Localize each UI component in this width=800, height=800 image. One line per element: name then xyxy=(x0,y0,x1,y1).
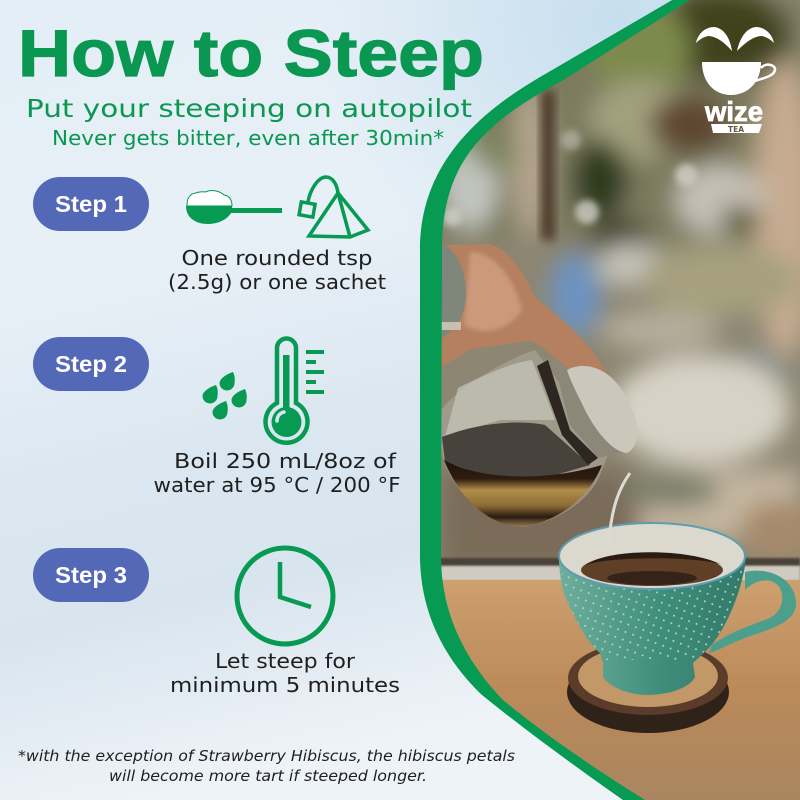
photo: table xyxy=(440,580,800,800)
step 3 badge xyxy=(33,548,149,602)
photo: window sill xyxy=(440,558,800,566)
step 3 badge: Step 3 xyxy=(55,562,127,588)
title: How to Steep xyxy=(18,16,484,90)
photo: hand xyxy=(441,243,607,381)
step 1 text xyxy=(168,246,386,294)
green curved band xyxy=(400,0,690,800)
photo: blurred garden backdrop xyxy=(400,0,800,570)
subtitle: Put your steeping on autopilot xyxy=(26,94,472,123)
photo: pouring water xyxy=(609,473,630,540)
footnote: *with the exception of Strawberry Hibiscus, the hibiscus petals xyxy=(18,747,515,765)
step 3 text: minimum 5 minutes xyxy=(170,673,400,697)
step 1 badge: Step 1 xyxy=(55,191,127,217)
icon: clock xyxy=(237,548,333,644)
step 3 text: Let steep for xyxy=(215,649,356,673)
background photo: teapot pouring tea into a cup xyxy=(400,0,800,800)
icon: tea sachet xyxy=(299,177,368,237)
photo: tree trunk xyxy=(541,90,555,240)
step 1 text: One rounded tsp xyxy=(182,246,372,270)
photo: watch strap xyxy=(441,243,466,338)
photo: bokeh lights xyxy=(443,130,697,226)
photo: glass teapot xyxy=(441,350,637,540)
logo: Wize Tea xyxy=(696,27,775,134)
footnote: will become more tart if steeped longer. xyxy=(109,767,427,785)
icon: thermometer xyxy=(266,338,324,443)
logo: Wize Tea: TEA xyxy=(728,125,744,134)
step 3 text xyxy=(170,649,400,697)
step 2 text xyxy=(154,449,400,497)
icon: water drops xyxy=(202,372,247,420)
step 1 text: (2.5g) or one sachet xyxy=(168,270,386,294)
step 2 text: water at 95 °C / 200 °F xyxy=(154,473,400,497)
step 2 badge: Step 2 xyxy=(55,351,127,377)
tagline: Never gets bitter, even after 30min* xyxy=(52,126,444,150)
photo: teapot strainer xyxy=(537,360,598,465)
step 2 text: Boil 250 mL/8oz of xyxy=(174,449,397,473)
logo: Wize Tea: wize xyxy=(704,96,763,127)
step 2 badge xyxy=(33,337,149,391)
photo: teapot lid xyxy=(567,366,637,453)
icon: scoop xyxy=(186,191,282,224)
footnote xyxy=(18,747,515,785)
photo: wooden coaster xyxy=(567,641,729,733)
photo: cup xyxy=(559,523,796,695)
step 1 badge xyxy=(33,177,149,231)
